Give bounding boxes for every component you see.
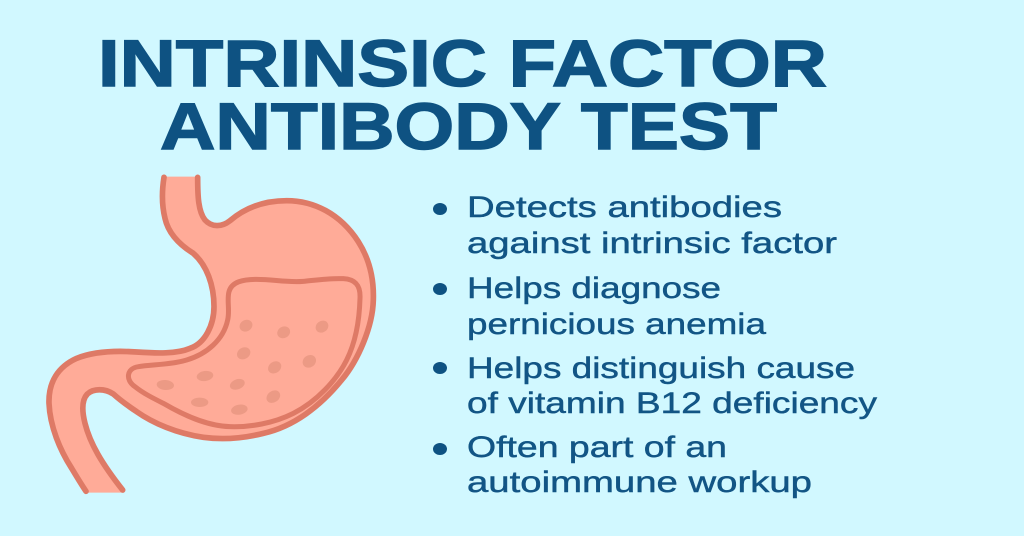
- bullet: helps diagnose: Helps diagnose: [467, 272, 721, 305]
- icon: stomach: [49, 177, 373, 493]
- bullet: helps distinguish: Helps distinguish cause: [467, 352, 855, 385]
- bullet: helps distinguish: [433, 352, 877, 420]
- stomach right wall: [83, 177, 373, 490]
- bullet: helps diagnose: [433, 272, 766, 341]
- bullet: autoimmune workup: [433, 431, 812, 499]
- bullet: helps diagnose: pernicious anemia: [467, 308, 766, 341]
- stomach inner lining: [128, 279, 360, 427]
- title: INTRINSIC FACTOR: [98, 26, 827, 100]
- stomach left wall: [49, 177, 214, 491]
- bullet: detects antibodies: [433, 191, 837, 260]
- stomach spots: [156, 317, 331, 416]
- title: ANTIBODY TEST: [160, 89, 777, 163]
- bullet: autoimmune workup: Often part of an: [467, 431, 727, 464]
- bullet: detects antibodies: against intrinsic factor: [467, 227, 837, 260]
- title: [98, 26, 827, 163]
- bullet: detects antibodies: Detects antibodies: [467, 191, 782, 224]
- bullet list: [433, 191, 877, 499]
- bullet: autoimmune workup: autoimmune workup: [467, 466, 812, 499]
- stomach body fill: [49, 177, 373, 493]
- bullet: helps distinguish: of vitamin B12 deficiency: [467, 387, 877, 420]
